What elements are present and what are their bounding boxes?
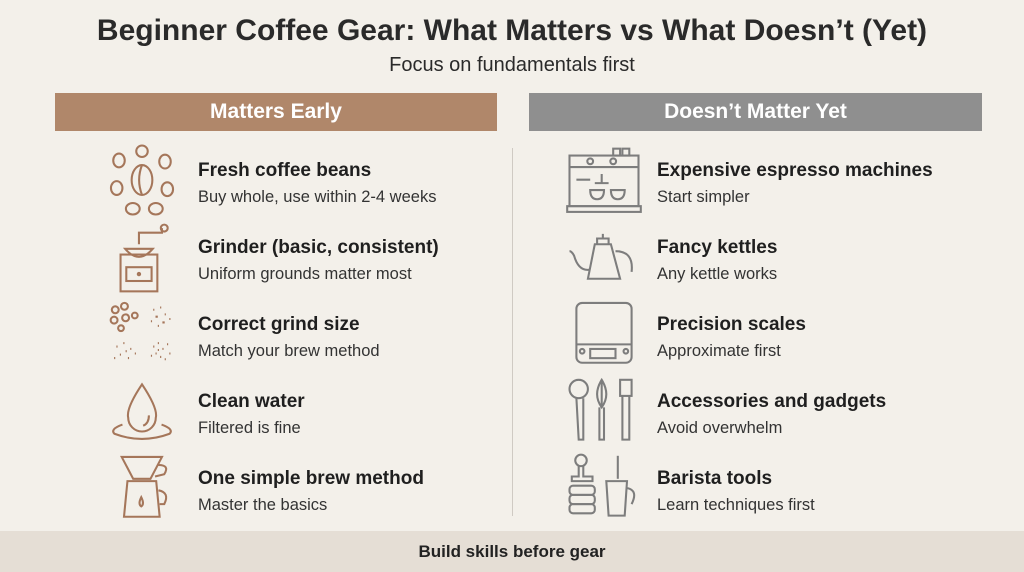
panel: doesn't matter yet list xyxy=(566,148,933,517)
footer banner: Build skills before gear xyxy=(418,542,606,561)
header: doesn't matter yet: Doesn’t Matter Yet xyxy=(664,100,847,123)
text: accessories: Avoid overwhelm xyxy=(657,419,782,437)
icon: espresso machine xyxy=(566,148,642,213)
text: scales xyxy=(657,314,806,360)
subtitle: Focus on fundamentals first xyxy=(389,54,635,76)
text: espresso: Start simpler xyxy=(657,188,750,206)
text: grinder: Grinder (basic, consistent) xyxy=(198,237,439,258)
text: clean water: Clean water xyxy=(198,391,305,412)
text: grind size xyxy=(198,314,380,360)
icon: grind sizes xyxy=(110,302,170,360)
text: fresh beans: Buy whole, use within 2-4 weeks xyxy=(198,188,436,206)
text: grind size: Correct grind size xyxy=(198,314,360,335)
text: kettles: Any kettle works xyxy=(657,265,777,283)
text: grind size: Match your brew method xyxy=(198,342,380,360)
text: fresh beans xyxy=(198,160,436,206)
text: accessories: Accessories and gadgets xyxy=(657,391,886,412)
header: doesn't matter yet xyxy=(529,93,982,131)
text: scales: Precision scales xyxy=(657,314,806,335)
text: accessories xyxy=(657,391,886,437)
text: kettles: Fancy kettles xyxy=(657,237,777,258)
text: kettles xyxy=(657,237,777,283)
icon: water drop xyxy=(112,382,172,440)
panel: matters early list xyxy=(110,144,439,518)
text: brew method: One simple brew method xyxy=(198,468,424,489)
text: grinder: Uniform grounds matter most xyxy=(198,265,412,283)
text: brew method xyxy=(198,468,424,514)
text: clean water: Filtered is fine xyxy=(198,419,301,437)
text: grinder xyxy=(198,237,439,283)
text: barista tools: Learn techniques first xyxy=(657,496,815,514)
icon: pour-over xyxy=(120,456,168,518)
icon: accessories xyxy=(568,378,633,441)
text: clean water xyxy=(198,391,305,437)
text: espresso: Expensive espresso machines xyxy=(657,160,933,181)
text: barista tools xyxy=(657,468,815,514)
icon: coffee beans xyxy=(110,144,174,216)
icon: barista tools xyxy=(568,454,636,517)
title: Beginner Coffee Gear: What Matters vs What Doesn’t (Yet) xyxy=(97,14,927,47)
icon: grinder xyxy=(120,224,169,292)
text: brew method: Master the basics xyxy=(198,496,327,514)
header: matters early xyxy=(55,93,497,131)
icon: kettle xyxy=(570,234,633,280)
header: matters early: Matters Early xyxy=(210,100,342,123)
text: barista tools: Barista tools xyxy=(657,468,772,489)
text: espresso xyxy=(657,160,933,206)
icon: scale xyxy=(575,302,633,364)
footer banner xyxy=(0,531,1024,572)
text: scales: Approximate first xyxy=(657,342,781,360)
text: fresh beans: Fresh coffee beans xyxy=(198,160,371,181)
